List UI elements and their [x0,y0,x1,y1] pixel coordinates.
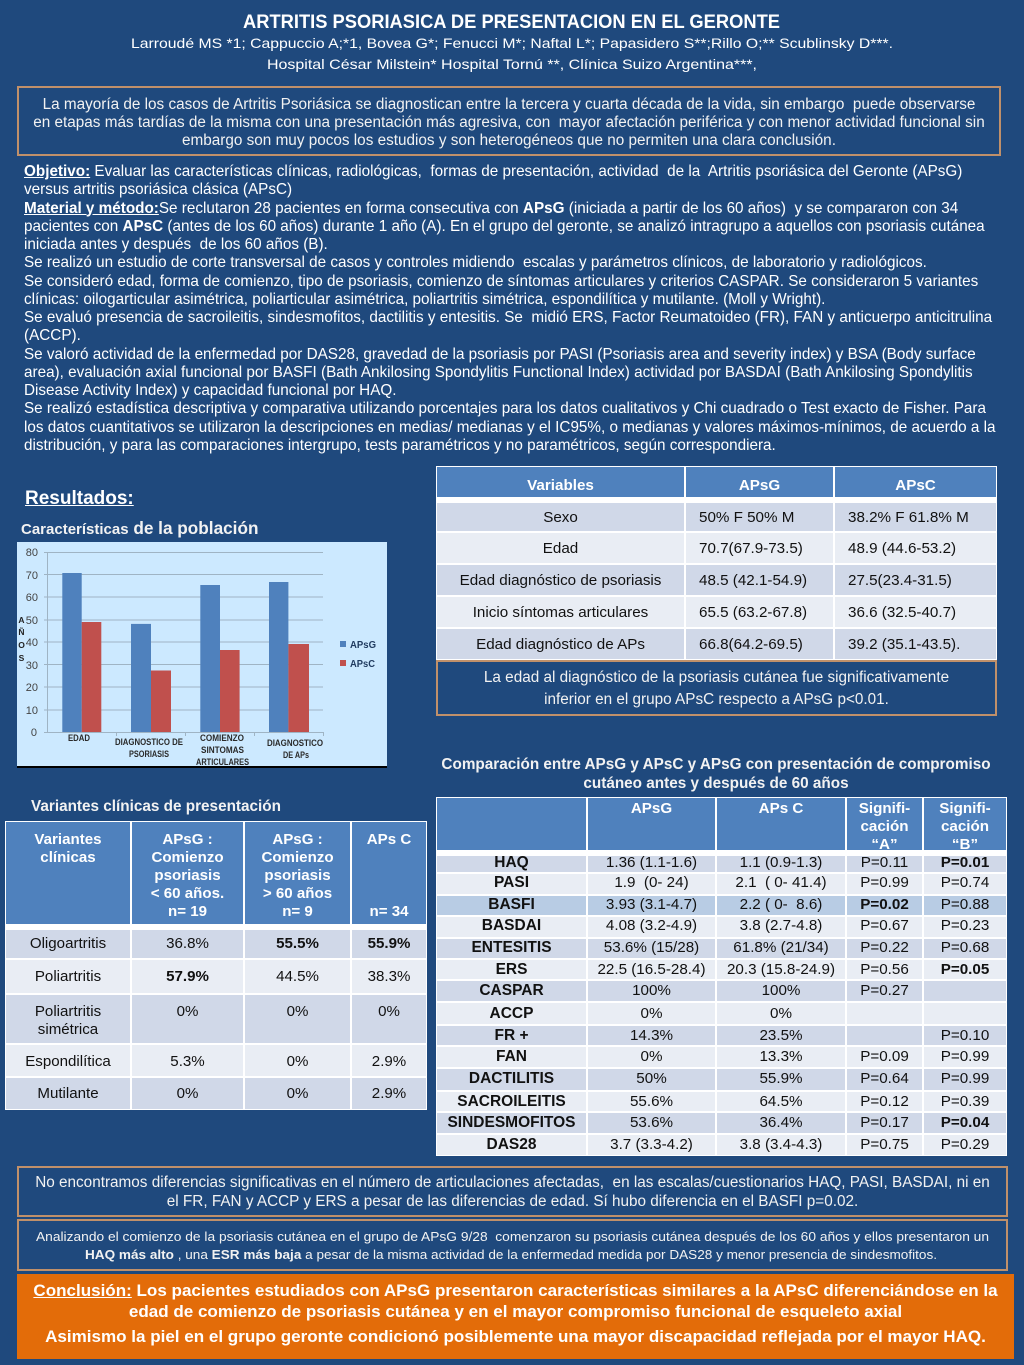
table: comparacion APsG vs APsC: P=0.05 [941,960,989,978]
callout: comienzo de la psoriasis: Analizando el comienzo de la psoriasis cutánea en el grupo de APsG 9/28 comenzaron su psoriasis cutánea después de los 60 años y ellos presentaron un [36,1229,989,1244]
table: variantes clinicas: APs C n= 34 [367,831,411,920]
callout: comienzo de la psoriasis: HAQ más alto , una ESR más baja a pesar de la misma actividad de la enfermedad medida por DAS28 y menor presencia de sindesmofitos. [85,1247,937,1262]
table: comparacion APsG vs APsC: P=0.02 [860,896,909,912]
y axis labels: 0 [31,727,37,739]
table: comparacion APsG vs APsC: 22.5 (16.5-28.4) [597,960,706,978]
table: comparacion APsG vs APsC: P=0.99 [941,1070,989,1086]
x axis labels: DE APs [283,750,309,760]
table: caracteristicas de la poblacion: 39.2 (35.1-43.5). [848,636,960,652]
table: variantes clinicas: Espondilítica [25,1052,111,1070]
heading: caracteristicas de la poblacion: Características de la población [21,518,258,538]
table: variantes clinicas: 36.8% [166,935,209,952]
table: caracteristicas de la poblacion: 66.8(64.2-69.5) [699,636,803,652]
table: comparacion APsG vs APsC: ACCP [490,1004,533,1022]
table: comparacion APsG vs APsC: 1.9 (0- 24) [614,874,689,891]
table: comparacion APsG vs APsC: 100% [762,982,800,999]
table: variantes clinicas: 0% [287,1003,308,1020]
table: caracteristicas de la poblacion: Inicio síntomas articulares [473,604,648,620]
table: comparacion APsG vs APsC: FR + [494,1026,529,1044]
table: variantes clinicas: Poliartritis [35,968,101,984]
table: variantes clinicas: 55.9% [368,935,410,952]
table: comparacion APsG vs APsC: PASI [494,874,529,891]
table: variantes clinicas: APsG : Comienzo psoriasis < 60 años. n= 19 [151,831,224,920]
legend: APsG [350,640,376,651]
table: variantes clinicas: 2.9% [372,1052,406,1070]
table: comparacion APsG vs APsC: 55.9% [759,1070,803,1086]
x axis labels [68,733,323,767]
table: comparacion APsG vs APsC: FAN [496,1048,527,1065]
table: comparacion APsG vs APsC: 0% [641,1048,662,1065]
table: variantes clinicas: 55.5% [276,935,319,952]
table: variantes clinicas: 38.3% [368,968,410,984]
y axis labels: 70 [26,570,38,582]
y axis title: anos [18,615,25,663]
table: comparacion APsG vs APsC: P=0.99 [860,874,909,891]
table: comparacion APsG vs APsC: 61.8% (21/34) [733,938,829,956]
table: comparacion APsG vs APsC: P=0.23 [941,917,989,934]
table: comparacion APsG vs APsC: 0% [770,1004,792,1022]
table: variantes clinicas: 0% [177,1003,198,1020]
table: comparacion APsG vs APsC [436,797,1007,1156]
table: comparacion APsG vs APsC: P=0.99 [941,1048,989,1065]
authors: Larroudé MS *1; Cappuccio A;*1, Bovea G*; Fenucci M*; Naftal L*; Papasidero S**;Rillo O;** Scublinsky D***. [131,35,893,51]
table: comparacion APsG vs APsC: 3.8 (2.7-4.8) [740,917,822,934]
heading: comparacion: Comparación entre APsG y APsC y APsG con presentación de compromiso cutáneo antes y después de 60 años [441,756,991,792]
x axis labels: EDAD [68,733,90,743]
x axis labels: COMIENZO [200,733,244,743]
table: comparacion APsG vs APsC: BASFI [488,896,535,912]
table: comparacion APsG vs APsC: 53.6% [630,1114,673,1131]
table: comparacion APsG vs APsC: ENTESITIS [471,938,552,956]
header: title, authors, hospitals [131,12,893,72]
table: comparacion APsG vs APsC: 3.93 (3.1-4.7) [606,896,697,912]
table: comparacion APsG vs APsC: 50% [636,1070,667,1086]
callout: edad al diagnostico [436,660,997,716]
table: comparacion APsG vs APsC: P=0.68 [941,938,989,956]
table: variantes clinicas: Mutilante [37,1084,99,1102]
table: comparacion APsG vs APsC: SACROILEITIS [457,1092,566,1110]
table: comparacion APsG vs APsC: P=0.56 [860,960,909,978]
table: comparacion APsG vs APsC: 3.7 (3.3-4.2) [610,1136,693,1153]
bars: diagnostico de psoriasis [131,624,171,732]
y axis labels: 30 [26,660,38,672]
y axis title: anos: A [18,615,25,625]
table: comparacion APsG vs APsC: BASDAI [482,917,541,934]
callout: edad al diagnostico: La edad al diagnóstico de la psoriasis cutánea fue significativamente inferior en el grupo APsC respecto a APsG p<0.01. [484,669,949,708]
table: comparacion APsG vs APsC: DAS28 [487,1136,536,1153]
table: comparacion APsG vs APsC: DACTILITIS [469,1070,554,1086]
table: variantes clinicas: 0% [287,1084,308,1102]
table: comparacion APsG vs APsC: 14.3% [630,1026,673,1044]
bars: diagnostico de APs [269,582,309,732]
table: caracteristicas de la poblacion: 38.2% F 61.8% M [848,508,969,526]
table: comparacion APsG vs APsC: 2.2 ( 0- 8.6) [740,896,822,912]
table: caracteristicas de la poblacion: Edad diagnóstico de APs [476,636,645,652]
x axis labels: PSORIASIS [129,749,169,759]
table: variantes clinicas: APsG : Comienzo psoriasis > 60 años n= 9 [261,831,334,920]
table: variantes clinicas: 44.5% [276,968,319,984]
y axis labels: 60 [26,592,38,604]
table: comparacion APsG vs APsC: P=0.10 [941,1026,989,1044]
table: comparacion APsG vs APsC: CASPAR [479,982,544,999]
table: caracteristicas de la poblacion: Edad [543,540,578,556]
table: variantes clinicas: 0% [287,1052,308,1070]
table: comparacion APsG vs APsC: P=0.74 [941,874,989,891]
y axis labels: 50 [26,615,38,627]
y axis labels: 80 [26,547,38,559]
table: comparacion APsG vs APsC: 55.6% [630,1092,673,1110]
table: caracteristicas de la poblacion [436,466,997,660]
table: comparacion APsG vs APsC: P=0.67 [860,917,909,934]
table: caracteristicas de la poblacion: 65.5 (63.2-67.8) [699,604,807,620]
table: variantes clinicas: 0% [177,1084,198,1102]
heading: variantes clinicas: Variantes clínicas de presentación [31,798,281,815]
legend [340,640,376,670]
table: comparacion APsG vs APsC: 23.5% [759,1026,803,1044]
table: comparacion APsG vs APsC: 53.6% (15/28) [604,938,699,956]
x axis labels: DIAGNOSTICO DE [115,737,183,747]
x axis labels: SINTOMAS [201,745,244,755]
table: comparacion APsG vs APsC: P=0.09 [860,1048,909,1065]
table: caracteristicas de la poblacion: 50% F 50% M [699,508,794,526]
table: comparacion APsG vs APsC: 13.3% [759,1048,803,1065]
hospitals: Hospital César Milstein* Hospital Tornú **, Clínica Suizo Argentina***, [267,56,757,72]
table: comparacion APsG vs APsC: 100% [632,982,671,999]
x axis labels: ARTICULARES [196,757,249,767]
table: comparacion APsG vs APsC: 64.5% [759,1092,803,1110]
bars: edad [62,573,101,732]
table: caracteristicas de la poblacion: Sexo [543,508,578,526]
table: variantes clinicas: 2.9% [372,1084,406,1102]
table: comparacion APsG vs APsC: P=0.12 [860,1092,909,1110]
table: comparacion APsG vs APsC: 20.3 (15.8-24.9) [727,960,835,978]
heading: resultados: Resultados: [25,488,134,509]
methods text block: Objetivo: Evaluar las características clínicas, radiológicas, formas de presentación, actividad de la Artritis psoriásica del Geronte (APsG) versus artritis psoriásica clásica (APsC) Material y método:Se reclutaron 28 pacientes en forma consecutiva con APsG (iniciada a partir de los 60 años) y se compararon con 34 pacientes con APsC (antes de los 60 años) durante 1 año (A). En el grupo del geronte, se analizó intragrupo a aquellos con psoriasis cutánea iniciada antes y después de los 60 años (B). Se realizó un estudio de corte transversal de casos y controles midiendo escalas y parámetros clínicos, de laboratorio y radiológicos. Se consideró edad, forma de comienzo, tipo de psoriasis, comienzo de síntomas articulares y criterios CASPAR. Se consideraron 5 variantes clínicas: oilogarticular asimétrica, poliarticular asimétrica, poliartritis simétrica, espondilítica y mutilante. (Moll y Wright). Se evaluó presencia de sacroileitis, sindesmofitos, dactilitis y entesitis. Se midió ERS, Factor Reumatoideo (FR), FAN y anticuerpo anticitrulina (ACCP). Se valoró actividad de la enfermedad por DAS28, gravedad de la psoriasis por PASI (Psoriasis area and severity index) y BSA (Body surface area), evaluación axial funcional por BASFI (Bath Ankilosing Spondylitis Functional Index) actividad por BASDAI (Bath Ankilosing Spondylitis Disease Activity Index) y capacidad funcional por HAQ. Se realizó estadística descriptiva y comparativa utilizando porcentajes para los datos cualitativos y Chi cuadrado o Test exacto de Fisher. Para los datos cuantitativos se utilizaron la descripciones en medias/ medianas y el IC95%, o medianas y valores máximos-mínimos, de acuerdo a la distribución, y para las comparaciones intergrupo, tests paramétricos y no paramétricos, según correspondiera. [24,163,996,454]
x axis labels: DIAGNOSTICO [267,738,323,748]
table: caracteristicas de la poblacion: APsG [739,476,780,494]
table: variantes clinicas: 0% [378,1003,400,1020]
table: variantes clinicas: 57.9% [166,968,209,984]
y axis labels [26,547,38,739]
table: variantes clinicas [5,821,427,1110]
panel: conclusion: Conclusión: Los pacientes estudiados con APsG presentaron características similares a la APsC diferenciándose en la edad de comienzo de psoriasis cutánea y en el mayor compromiso funcional de esqueleto axial [33,1281,998,1321]
table: comparacion APsG vs APsC: P=0.64 [860,1070,909,1086]
y axis labels: 10 [26,705,38,717]
table: comparacion APsG vs APsC: 36.4% [759,1114,803,1131]
table: comparacion APsG vs APsC: P=0.88 [941,896,989,912]
table: comparacion APsG vs APsC: SINDESMOFITOS [447,1114,576,1131]
y axis labels: 40 [26,637,38,649]
y axis title: anos: S [19,653,25,663]
title: ARTRITIS PSORIASICA DE PRESENTACION EN EL GERONTE [243,12,780,33]
table: caracteristicas de la poblacion: Edad diagnóstico de psoriasis [460,572,661,588]
table: comparacion APsG vs APsC: P=0.39 [941,1092,989,1110]
table: comparacion APsG vs APsC: P=0.04 [941,1114,989,1131]
table: comparacion APsG vs APsC: ERS [496,960,527,978]
table: variantes clinicas: 5.3% [170,1052,205,1070]
table: comparacion APsG vs APsC: P=0.29 [941,1136,989,1153]
legend: APsC [350,659,375,670]
table: variantes clinicas: Oligoartritis [30,935,106,952]
y axis title: anos: O [18,640,25,650]
intro text box: La mayoría de los casos de Artritis Psoriásica se diagnostican entre la tercera y cuarta década de la vida, sin embargo puede observarse en etapas más tardías de la misma con una presentación más agresiva, con mayor afectación periférica y con menor actividad funcional sin embargo son muy pocos los estudios y son heterogéneos que no permiten una clara conclusión. [33,96,985,149]
table: comparacion APsG vs APsC: 4.08 (3.2-4.9) [606,917,697,934]
y axis title: anos: Ñ [18,627,25,637]
table: comparacion APsG vs APsC: P=0.75 [860,1136,909,1153]
table: caracteristicas de la poblacion: 70.7(67.9-73.5) [699,540,803,556]
callout: sin diferencias significativas: No encontramos diferencias significativas en el número de articulaciones afectadas, en las escalas/cuestionarios HAQ, PASI, BASDAI, ni en el FR, FAN y ACCP y ERS a pesar de las diferencias de edad. Sí hubo diferencia en el BASFI p=0.02. [35,1174,990,1210]
callout: comienzo de la psoriasis [17,1219,1008,1271]
table: comparacion APsG vs APsC: 2.1 ( 0- 41.4) [735,874,827,891]
panel: conclusion [17,1274,1014,1359]
callout: sin diferencias significativas [17,1166,1008,1217]
table: caracteristicas de la poblacion: 27.5(23.4-31.5) [848,572,952,588]
table: caracteristicas de la poblacion: APsC [895,476,936,494]
panel: conclusion: Asimismo la piel en el grupo geronte condicionó posiblemente una mayor discapacidad reflejada por el mayor HAQ. [45,1327,986,1346]
table: caracteristicas de la poblacion: Variables [527,476,594,494]
table: caracteristicas de la poblacion: 48.5 (42.1-54.9) [699,572,807,588]
table: comparacion APsG vs APsC: 0% [641,1004,662,1022]
y axis labels: 20 [26,682,38,694]
table: comparacion APsG vs APsC: 3.8 (3.4-4.3) [740,1136,822,1153]
table: comparacion APsG vs APsC: APsG [631,800,672,817]
bar chart: edades por grupo [17,542,387,768]
table: caracteristicas de la poblacion: 36.6 (32.5-40.7) [848,604,956,620]
table: comparacion APsG vs APsC: P=0.27 [860,982,909,999]
table: caracteristicas de la poblacion: 48.9 (44.6-53.2) [848,540,956,556]
table: variantes clinicas: Variantes clínicas [34,831,102,866]
table: comparacion APsG vs APsC: P=0.17 [860,1114,909,1131]
bars: comienzo sintomas articulares [200,585,240,732]
table: comparacion APsG vs APsC: P=0.22 [860,938,909,956]
table: variantes clinicas: Poliartritis simétrica [35,1003,101,1038]
table: comparacion APsG vs APsC: APs C [759,800,803,817]
